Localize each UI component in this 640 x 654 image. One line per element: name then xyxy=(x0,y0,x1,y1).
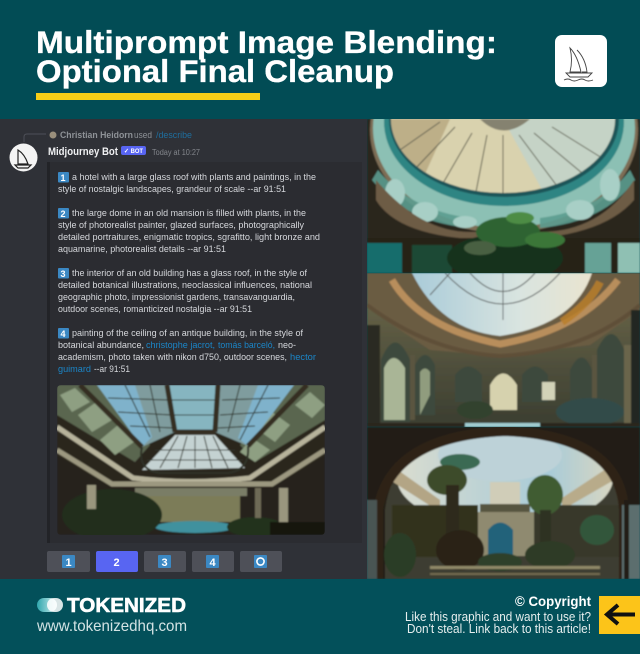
image: glass roof atrium xyxy=(57,385,325,541)
reply line: /describe xyxy=(156,130,192,141)
prompt 1: 1 xyxy=(60,173,66,183)
prompt 4: tomás barceló, xyxy=(218,340,275,350)
image: atrium with arches xyxy=(367,273,640,427)
website: www.tokenizedhq.com xyxy=(36,618,187,635)
prompt 2: style of photorealist painter, glazed surfaces, photographically xyxy=(58,220,304,230)
button 3: 3 xyxy=(162,557,168,569)
image: arched hall with palms xyxy=(367,427,640,579)
buttons xyxy=(47,551,282,572)
button 2 active xyxy=(96,551,138,572)
prompt 2: detailed portraitures, enigmatic tropics, sgrafitto, light bronze and xyxy=(58,232,320,242)
icon: Tokenized pills xyxy=(37,598,63,612)
image: dome with teal ring xyxy=(367,119,640,273)
button 4: 4 xyxy=(210,557,216,569)
embed left border xyxy=(47,162,50,543)
prompt 3: 3 xyxy=(60,269,66,279)
button 1 xyxy=(47,551,90,572)
title underline xyxy=(36,93,260,100)
copyright notice: Don't steal. Link back to this article! xyxy=(407,622,591,636)
prompt 4: hector xyxy=(290,352,316,362)
prompt 4: christophe jacrot, xyxy=(146,340,215,350)
copyright notice: Like this graphic and want to use it? xyxy=(405,610,591,624)
prompt 4: painting of the ceiling of an antique building, in the style of xyxy=(72,328,303,338)
panel: Discord chat xyxy=(0,119,367,579)
icon: bot avatar xyxy=(10,144,38,172)
button 3 xyxy=(144,551,186,572)
prompt 1 xyxy=(58,172,316,194)
prompt 3: detailed botanical illustrations, neoclassical influences, national xyxy=(58,280,312,290)
prompt 3: outdoor scenes, romanticized nostalgia --ar 91:51 xyxy=(58,304,252,314)
prompt 4: academism, photo taken with nikon d750, outdoor scenes, xyxy=(58,352,287,362)
prompt 1: style of nostalgic landscapes, grandeur of scale --ar 91:51 xyxy=(58,184,286,194)
prompt 4: 4 xyxy=(60,329,66,339)
timestamp: Today at 10:27 xyxy=(152,148,201,157)
button 2 active: 2 xyxy=(114,557,120,569)
button refresh xyxy=(240,551,282,572)
prompt 2: the large dome in an old mansion is filled with plants, in the xyxy=(72,208,306,218)
prompt 1: a hotel with a large glass roof with plants and paintings, in the xyxy=(72,172,316,182)
button 4 xyxy=(192,551,234,572)
copyright notice xyxy=(405,594,591,636)
reply line xyxy=(50,130,192,141)
prompt 2: aquamarine, photorealist details --ar 91:51 xyxy=(58,244,226,254)
prompt 2: 2 xyxy=(60,209,66,219)
bot name: Midjourney Bot xyxy=(48,146,118,158)
footer background xyxy=(0,579,640,654)
prompt 3: the interior of an old building has a glass roof, in the style of xyxy=(72,268,307,278)
prompt 2 xyxy=(58,208,320,254)
bot badge: ✓ BOT xyxy=(124,148,143,155)
reply line: Christian Heidorn xyxy=(60,130,133,141)
header background xyxy=(0,0,640,119)
footer logo: TOKENIZED xyxy=(67,595,186,617)
reply connector xyxy=(24,134,46,142)
message embed background xyxy=(47,162,362,543)
side panels xyxy=(57,385,150,462)
prompt 4: guimard xyxy=(58,364,91,374)
prompt 3: geographic photo, impressionist gardens, transavanguardia, xyxy=(58,292,295,302)
icon: Midjourney boat logo xyxy=(555,35,607,87)
copyright notice: © Copyright xyxy=(515,594,591,609)
title: Multiprompt Image Blending: xyxy=(36,24,497,60)
icon: yellow arrow box xyxy=(599,596,640,634)
prompt 4 xyxy=(58,328,316,374)
prompt 3 xyxy=(58,268,312,314)
reply line: used xyxy=(134,130,152,141)
prompt 4: botanical abundance, xyxy=(58,340,144,350)
upper roof sides xyxy=(134,385,175,447)
prompt 4: --ar 91:51 xyxy=(94,364,130,374)
bot badge xyxy=(121,146,146,155)
button 1: 1 xyxy=(66,557,72,569)
title xyxy=(36,24,497,89)
prompt 4: neo- xyxy=(278,340,296,350)
title: Optional Final Cleanup xyxy=(36,53,394,89)
